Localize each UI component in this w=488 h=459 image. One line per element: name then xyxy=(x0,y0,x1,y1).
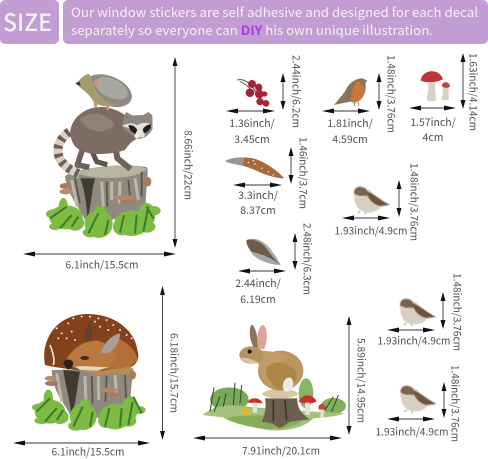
tail xyxy=(58,132,79,174)
arrow: sparrow lower right height xyxy=(442,382,446,418)
label: robin width: 4.59cm xyxy=(332,132,368,146)
icon: spotted feather xyxy=(225,157,284,178)
stump xyxy=(262,398,310,428)
label: feather width: 8.37cm xyxy=(240,202,276,218)
spots xyxy=(56,316,133,341)
label: feather width: 3.3inch/ xyxy=(238,188,278,202)
illustration: hedgehog on raccoon on stump xyxy=(46,68,161,238)
icon: red berries xyxy=(237,80,269,107)
grass xyxy=(210,387,249,411)
stump xyxy=(65,166,148,227)
icon: sparrow upper right xyxy=(400,299,436,326)
label: raccoon width: 6.1inch/15.5cm xyxy=(66,258,138,272)
label: sparrow middle width: 1.93inch/4.9cm xyxy=(334,224,408,238)
arrow: mushrooms width xyxy=(409,106,456,110)
label: sparrow lower right width: 1.93inch/4.9cm xyxy=(376,424,448,440)
label: leaf height: 2.48inch/6.3cm xyxy=(300,223,314,295)
icon: grey leaf feather xyxy=(247,239,281,265)
header: size tag: SIZE xyxy=(3,3,52,38)
moss xyxy=(32,390,146,431)
label: sparrow upper right width: 1.93inch/4.9cm xyxy=(378,334,450,348)
hedgehog xyxy=(80,68,137,114)
label: rabbit width: 7.91inch/20.1cm xyxy=(242,444,320,458)
moss xyxy=(46,198,161,238)
label: berries height: 2.44inch/6.2cm xyxy=(288,55,304,128)
rabbit tail xyxy=(281,376,295,393)
rabbit ears xyxy=(250,324,258,350)
icon: red mushrooms xyxy=(421,71,450,101)
yellow flowers xyxy=(241,408,251,415)
fawn body xyxy=(44,314,138,371)
arrow: sparrow upper right width xyxy=(387,328,435,332)
arrow: sparrow lower right width xyxy=(387,416,435,422)
pad xyxy=(80,366,132,375)
arrow: robin height xyxy=(376,73,382,110)
head xyxy=(65,341,117,370)
rabbit head xyxy=(239,346,263,364)
label: berries width: 1.36inch/ xyxy=(229,116,275,130)
mushrooms xyxy=(247,398,263,403)
arrow: fawn height xyxy=(160,286,165,440)
arrow: raccoon height xyxy=(172,57,178,248)
raccoon head xyxy=(122,112,153,139)
rabbit body xyxy=(258,351,303,391)
arrow: robin width xyxy=(322,108,370,114)
label: sparrow lower right height: 1.48inch/3.76cm xyxy=(448,365,462,442)
arrow: berries height xyxy=(280,73,286,110)
header: description banner: separately so everyone can DIY his own unique illustration. xyxy=(71,20,433,39)
label: mushrooms width: 4cm xyxy=(423,130,443,144)
arrow: rabbit width xyxy=(193,436,342,440)
label: feather height: 1.46inch/3.7cm xyxy=(296,137,310,209)
arrow: sparrow middle width xyxy=(342,216,390,220)
icon: robin xyxy=(334,78,367,106)
arrow: leaf height xyxy=(292,233,298,270)
label: sparrow middle height: 1.48inch/3.76cm xyxy=(406,163,422,241)
arrow: feather height xyxy=(288,147,294,184)
arrow: mushrooms height xyxy=(460,53,466,109)
label: raccoon height: 8.66inch/22cm xyxy=(180,130,196,200)
arrow: sparrow middle height xyxy=(396,180,402,217)
label: sparrow upper right height: 1.48inch/3.76cm xyxy=(450,273,464,351)
arrow: raccoon width xyxy=(23,252,176,256)
icon: sparrow middle xyxy=(354,187,390,214)
label: leaf width: 6.19cm xyxy=(240,292,276,306)
label: mushrooms height: 1.63inch/4.14cm xyxy=(466,53,480,131)
icon: sparrow lower right xyxy=(400,386,436,413)
illustration: rabbit on stump with mushrooms xyxy=(203,324,346,430)
mushrooms xyxy=(45,376,55,381)
raccoon legs xyxy=(77,147,89,167)
ear xyxy=(101,333,120,353)
header: description banner: Our window stickers are self adhesive and designed for each decal xyxy=(71,2,478,21)
raccoon body xyxy=(70,107,138,154)
ear back xyxy=(85,320,92,341)
arrow: feather width xyxy=(233,182,282,188)
label: rabbit height: 5.89inch/14.95cm xyxy=(354,338,368,423)
label: leaf width: 2.44inch/ xyxy=(235,276,281,290)
arrow: berries width xyxy=(226,108,275,114)
arrow: leaf width xyxy=(238,268,286,274)
arrow: fawn width xyxy=(13,440,150,446)
header: description banner xyxy=(63,0,488,44)
label: berries width: 3.45cm xyxy=(234,132,270,146)
arrow: sparrow upper right height xyxy=(440,292,446,329)
arrow: rabbit height xyxy=(346,316,352,435)
label: mushrooms width: 1.57inch/ xyxy=(410,114,456,130)
label: fawn height: 6.18inch/15.7cm xyxy=(166,333,182,413)
stump xyxy=(52,368,133,423)
header: size tag xyxy=(0,0,59,44)
mushrooms xyxy=(60,183,72,189)
illustration: sleeping fawn on stump xyxy=(32,314,146,431)
label: robin width: 1.81inch/ xyxy=(327,116,373,130)
label: robin height: 1.48inch/3.76cm xyxy=(384,55,398,133)
